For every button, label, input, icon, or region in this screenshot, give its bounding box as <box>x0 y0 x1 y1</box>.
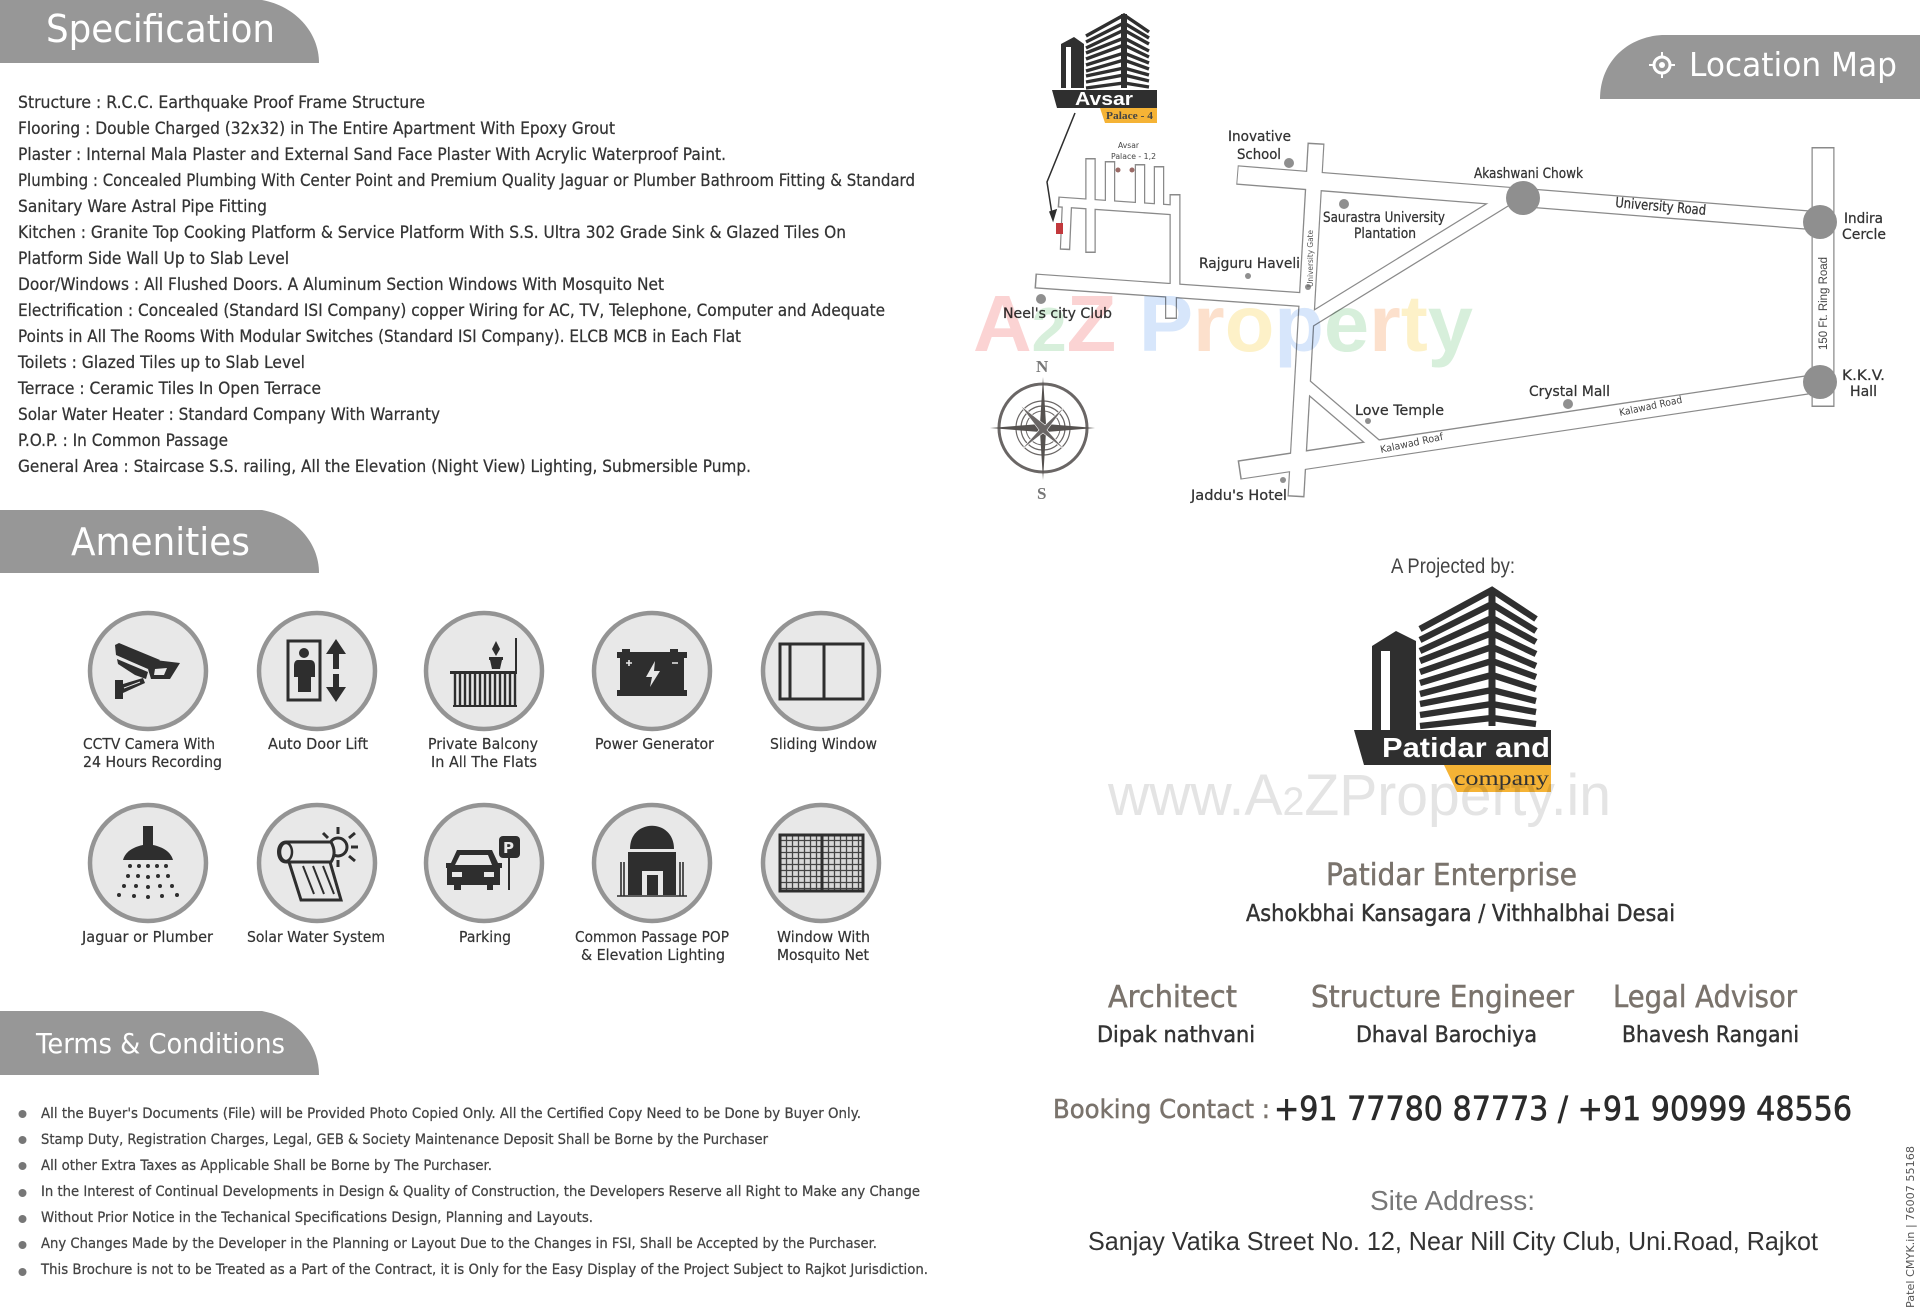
label: window with mosquito net: Mosquito Net <box>777 946 869 964</box>
label: CCTV camera: CCTV Camera With <box>83 735 215 753</box>
text block: map labels: Indira <box>1844 211 1883 227</box>
label: private balcony: Private Balcony <box>428 735 538 753</box>
text block: terms list: All the Buyer's Documents (File) will be Provided Photo Copied Only. All the Certified Copy Need to be Done by Buyer Only. <box>41 1106 861 1122</box>
text block: specification list: Structure : R.C.C. Earthquake Proof Frame Structure <box>18 93 425 113</box>
text: print credit: Patel CMYK.in | 76007 55168 <box>1905 1146 1917 1308</box>
heading: Specification <box>0 0 319 63</box>
text block: legal advisor <box>1613 980 1799 1048</box>
text block: architect: Architect <box>1108 980 1237 1015</box>
text block: specification list: Electrification : Concealed (Standard ISI Company) copper Wiring for AC, TV, Telephone, Computer and Adequate <box>18 301 885 321</box>
icon: jaguar or plumber shower <box>90 805 206 921</box>
text block: booking contact <box>1053 1089 1852 1128</box>
chart: location map roads <box>1035 143 1837 497</box>
text block: map labels: Hall <box>1850 384 1877 400</box>
text block: structure engineer: Structure Engineer <box>1311 980 1575 1015</box>
text block: specification list: Sanitary Ware Astral Pipe Fitting <box>18 197 267 217</box>
text block: booking contact: Booking Contact : <box>1053 1095 1270 1125</box>
icon: compass: N <box>1036 357 1049 376</box>
text block: specification list: Plumbing : Concealed Plumbing With Center Point and Premium Quality Jaguar or Plumber Bathroom Fitting & Standard <box>18 171 915 191</box>
text block: map labels: Inovative <box>1228 129 1291 145</box>
map nodes <box>1036 158 1837 483</box>
label: window with mosquito net: Window With <box>777 928 870 946</box>
text block: map labels: Kalawad Roaf <box>1379 432 1445 456</box>
text block: developer: Patidar Enterprise <box>1326 858 1577 893</box>
text block: specification list: Kitchen : Granite Top Cooking Platform & Service Platform With S.S. Ultra 302 Grade Sink & Glazed Tiles On <box>18 223 846 243</box>
text block: specification list: Platform Side Wall Up to Slab Level <box>18 249 289 269</box>
text block: map labels: Akashwani Chowk <box>1474 166 1584 182</box>
icon: window with mosquito net <box>763 805 879 921</box>
text block: site address <box>1088 1185 1819 1256</box>
text block: map labels: Palace - 1,2 <box>1111 152 1156 161</box>
heading: Location Map <box>1600 35 1920 99</box>
logo: Avsar Palace 4: Palace - 4 <box>1106 110 1154 122</box>
icon: compass <box>990 357 1095 503</box>
text block: map labels: 150 Ft. Ring Road <box>1818 257 1830 350</box>
text block: map labels: Plantation <box>1354 226 1416 242</box>
watermark: A2Z Property: A2Z Property <box>973 279 1474 368</box>
heading: Terms & Conditions <box>0 1011 319 1075</box>
icon: sliding window <box>763 613 879 729</box>
text block: specification list: Plaster : Internal Mala Plaster and External Sand Face Plaster With Acrylic Waterproof Paint. <box>18 145 726 165</box>
logo: Patidar and company: Patidar and <box>1382 732 1550 763</box>
logo: Avsar Palace 4: Avsar <box>1075 89 1133 109</box>
text block: map labels: University Gate <box>1306 230 1315 287</box>
icon: compass: S <box>1037 484 1046 503</box>
text block: terms list: This Brochure is not to be Treated as a Part of the Contract, it is Only for the Easy Display of the Project Subject to Rajkot Jurisdiction. <box>40 1262 928 1278</box>
icon: power generator <box>594 613 710 729</box>
text: projected by: A Projected by: <box>1391 555 1515 578</box>
panel: amenities grid <box>81 613 879 964</box>
text block: map labels: Kalawad Road <box>1618 395 1683 419</box>
label: auto door lift: Auto Door Lift <box>268 735 368 753</box>
text block: map labels: Cercle <box>1842 227 1886 243</box>
heading: Specification: Specification <box>46 7 275 51</box>
label: common passage <box>575 928 729 964</box>
icon: CCTV camera <box>90 613 206 729</box>
icon: auto door lift <box>259 613 375 729</box>
text block: site address: Sanjay Vatika Street No. 12, Near Nill City Club, Uni.Road, Rajkot <box>1088 1226 1819 1256</box>
text block: structure engineer: Dhaval Barochiya <box>1356 1023 1537 1048</box>
text block: terms list: All other Extra Taxes as Applicable Shall be Borne by The Purchaser. <box>41 1158 492 1174</box>
icon: private balcony <box>426 613 542 729</box>
map markers: avsar palace plots <box>1056 168 1134 234</box>
text block: specification list: Toilets : Glazed Tiles up to Slab Level <box>17 353 305 373</box>
text block: developer: Ashokbhai Kansagara / Vithhalbhai Desai <box>1246 901 1675 927</box>
label: common passage: Common Passage POP <box>575 928 729 946</box>
text block: map labels: Avsar <box>1118 141 1140 150</box>
text block: specification list: P.O.P. : In Common Passage <box>18 431 228 451</box>
label: jaguar or plumber: Jaguar or Plumber <box>81 928 214 946</box>
label: parking: Parking <box>459 928 511 946</box>
watermark: website: www.A2ZProperty.in <box>1107 763 1611 828</box>
text block: map labels: Saurastra University <box>1323 210 1445 226</box>
icon: parking: P <box>503 839 514 857</box>
label: solar water system: Solar Water System <box>247 928 385 946</box>
label: CCTV camera <box>83 735 222 771</box>
label: private balcony: In All The Flats <box>431 753 537 771</box>
text block: terms list: Stamp Duty, Registration Charges, Legal, GEB & Society Maintenance Deposit Shall be Borne by the Purchaser <box>41 1132 768 1148</box>
logo: Patidar and company: company <box>1454 768 1549 790</box>
icon: parking <box>426 805 542 921</box>
icon: common passage <box>594 805 710 921</box>
text block: specification list: General Area : Staircase S.S. railing, All the Elevation (Night View) Lighting, Submersible Pump. <box>18 457 751 477</box>
text block: map labels: Rajguru Haveli <box>1199 256 1300 272</box>
text block: specification list: Terrace : Ceramic Tiles In Open Terrace <box>17 379 321 399</box>
text block: specification list: Points in All The Rooms With Modular Switches (Standard ISI Company). ELCB MCB in Each Flat <box>18 327 741 347</box>
heading: Amenities: Amenities <box>71 520 250 564</box>
text block: map labels: University Road <box>1615 195 1707 219</box>
logo: Avsar Palace 4 <box>1052 14 1157 123</box>
text block: map labels: Crystal Mall <box>1529 384 1610 400</box>
text block: terms list: In the Interest of Continual Developments in Design & Quality of Construction, the Developers Reserve all Right to Make any Change <box>41 1184 920 1200</box>
label: CCTV camera: 24 Hours Recording <box>83 753 222 771</box>
logo: Patidar and company <box>1354 589 1551 792</box>
icon: solar water system <box>259 805 375 921</box>
label: common passage: & Elevation Lighting <box>581 946 725 964</box>
text block: architect <box>1097 980 1255 1048</box>
heading: Amenities <box>0 510 319 573</box>
text block: legal advisor: Bhavesh Rangani <box>1622 1023 1799 1048</box>
text block: specification list: Solar Water Heater : Standard Company With Warranty <box>18 405 440 425</box>
text block: site address: Site Address: <box>1370 1185 1535 1216</box>
text block: specification list <box>17 93 915 477</box>
text block: map labels: Neel's city Club <box>1003 306 1112 322</box>
text block: map labels: Jaddu's Hotel <box>1190 488 1287 504</box>
text block: map labels: K.K.V. <box>1842 368 1885 384</box>
text block: legal advisor: Legal Advisor <box>1613 980 1798 1015</box>
text block: terms list <box>18 1106 928 1278</box>
text block: architect: Dipak nathvani <box>1097 1023 1255 1048</box>
text block: developer <box>1246 858 1675 927</box>
text block: specification list: Flooring : Double Charged (32x32) in The Entire Apartment With Epoxy Grout <box>18 119 615 139</box>
arrow: logo to site <box>1047 113 1075 220</box>
label: power generator: Power Generator <box>595 735 715 753</box>
text block: booking contact: +91 77780 87773 / +91 90999 48556 <box>1274 1089 1852 1128</box>
heading: Location Map: Location Map <box>1689 45 1897 84</box>
text block: terms list: Without Prior Notice in the Techanical Specifications Design, Planning and Layouts. <box>41 1210 593 1226</box>
text block: specification list: Door/Windows : All Flushed Doors. A Aluminum Section Windows With Mosquito Net <box>18 275 664 295</box>
label: sliding window: Sliding Window <box>770 735 877 753</box>
text block: terms list: Any Changes Made by the Developer in the Planning or Layout Due to the Changes in FSI, Shall be Accepted by the Purchaser. <box>41 1236 877 1252</box>
text block: structure engineer <box>1311 980 1575 1048</box>
text block: map labels: School <box>1237 147 1281 163</box>
heading: Terms & Conditions: Terms & Conditions <box>35 1027 285 1060</box>
label: window with mosquito net <box>777 928 870 964</box>
label: private balcony <box>428 735 538 771</box>
text block: map labels: Love Temple <box>1355 403 1444 419</box>
text block: map labels <box>1003 129 1886 504</box>
